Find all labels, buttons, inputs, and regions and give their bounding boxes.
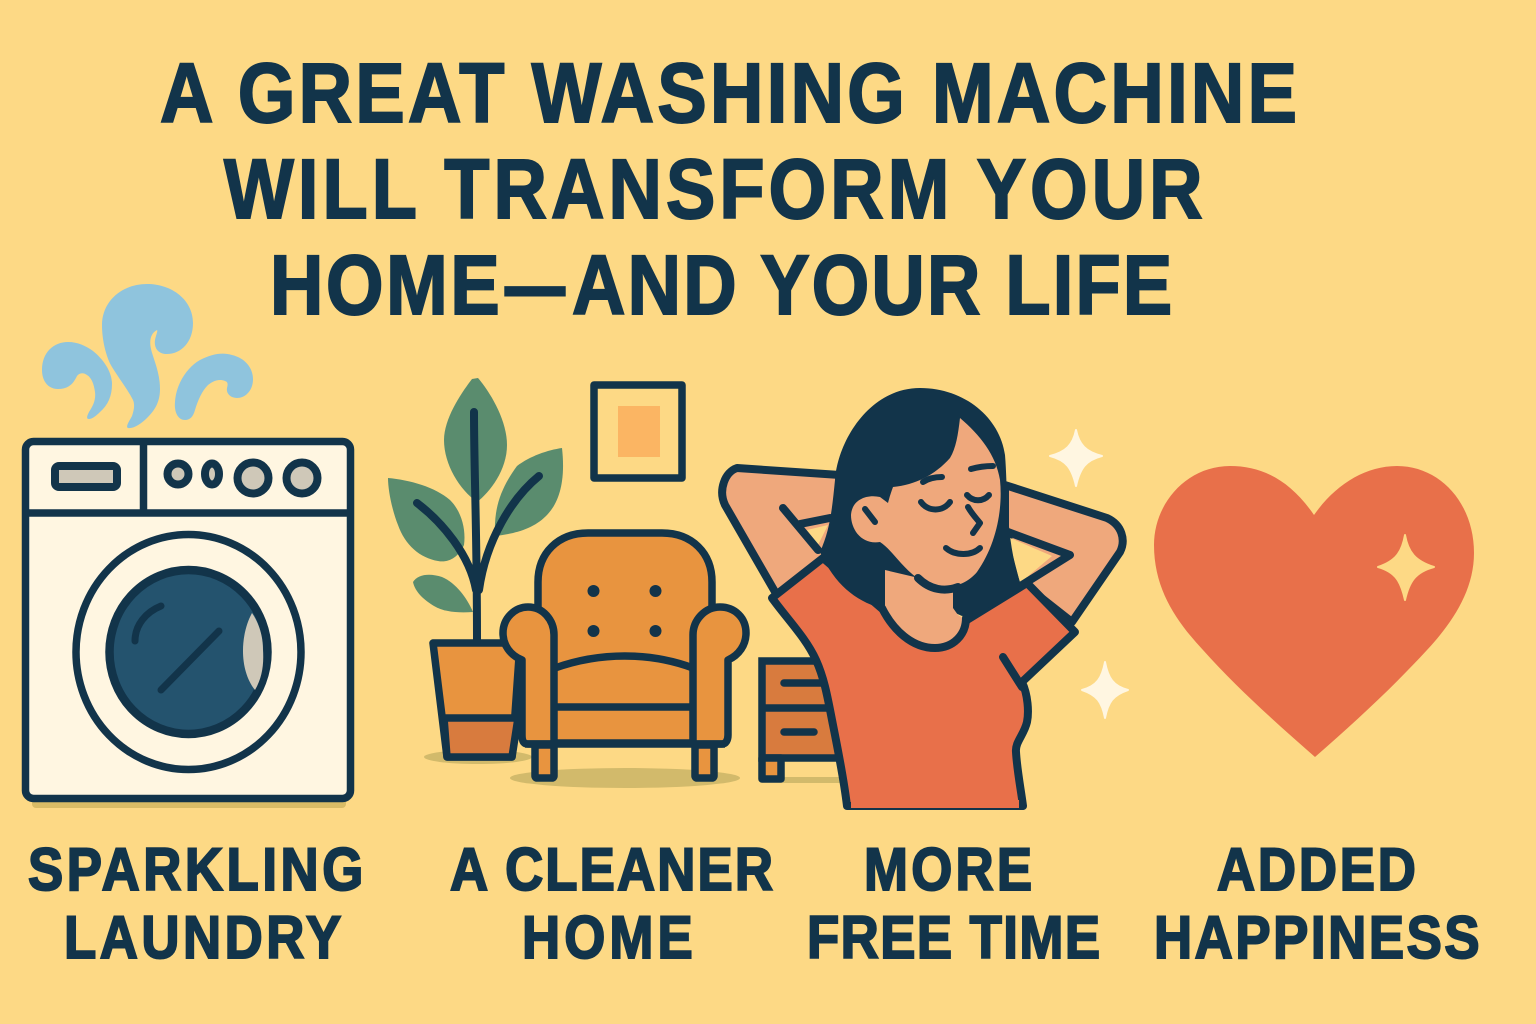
- left arm: [722, 468, 840, 597]
- chair buttons: [588, 585, 662, 637]
- icon: washing machine: [26, 442, 350, 808]
- label: a cleaner home: [450, 836, 773, 971]
- shirt: [772, 558, 1075, 808]
- icon: nightstand: [762, 661, 852, 783]
- label: more free time: FREE TIME: [807, 904, 1100, 971]
- label: a cleaner home: A CLEANER: [450, 836, 773, 903]
- title: AND YOUR LIFE: [572, 238, 1172, 332]
- icon: steam: [42, 284, 253, 428]
- control knobs: [168, 462, 318, 494]
- title: [160, 46, 1297, 332]
- facial features: [865, 466, 993, 554]
- title: —: [505, 238, 565, 332]
- label: sparkling laundry: SPARKLING: [28, 836, 363, 903]
- label: added happiness: [1154, 836, 1480, 971]
- icon: picture frame: [594, 385, 682, 478]
- icon: sparkles: [1050, 430, 1128, 718]
- label: sparkling laundry: LAUNDRY: [64, 904, 341, 971]
- icon: armchair: [503, 533, 746, 788]
- label: more free time: MORE: [864, 836, 1032, 903]
- label: added happiness: HAPPINESS: [1154, 904, 1480, 971]
- face: [851, 418, 1001, 590]
- title: HOME: [270, 238, 500, 332]
- right arm: [1005, 485, 1123, 622]
- label: a cleaner home: HOME: [522, 904, 693, 971]
- hair: [820, 388, 1021, 616]
- title: A GREAT WASHING MACHINE: [160, 46, 1297, 140]
- icon: heart: [1154, 466, 1474, 757]
- detergent drawer: [55, 466, 117, 487]
- icon: potted plant: [388, 378, 563, 764]
- label: more free time: [807, 836, 1100, 971]
- neck: [882, 570, 966, 648]
- title: WILL TRANSFORM YOUR: [224, 142, 1203, 236]
- icon: relaxing woman: [722, 388, 1123, 808]
- label: added happiness: ADDED: [1217, 836, 1416, 903]
- label: sparkling laundry: [28, 836, 363, 971]
- washer door: [76, 534, 301, 770]
